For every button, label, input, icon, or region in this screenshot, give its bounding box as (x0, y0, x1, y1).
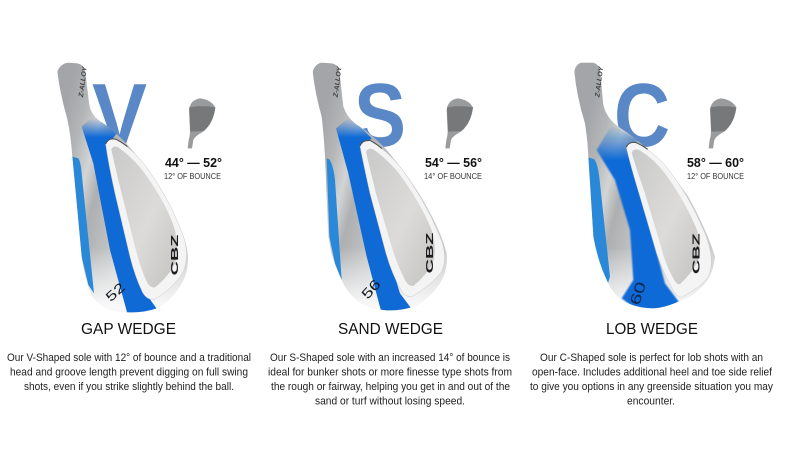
logo: CBZ: CBZ (692, 233, 703, 274)
wedge illustration: gap wedge (57, 62, 188, 312)
large letter V: V (92, 65, 147, 164)
large letter C: C (614, 66, 670, 166)
logo: CBZ: CBZ (170, 235, 181, 275)
bounce label: 14° OF BOUNCE (424, 172, 482, 181)
description: sand wedge: Our S-Shaped sole with an increased 14° of bounce is (270, 352, 511, 364)
heading: gap wedge: GAP WEDGE (81, 321, 176, 338)
description: gap wedge: shots, even if you strike slightly behind the ball. (24, 381, 234, 393)
loft stamp: 60: 60 (628, 280, 650, 307)
loft range: 44° — 52° (165, 155, 222, 170)
description: lob wedge: to give you options in any greenside situation you may (530, 381, 774, 393)
loft range: 58° — 60° (687, 155, 744, 170)
description: lob wedge (530, 352, 774, 408)
logo: Z-ALLOY: Z-ALLOY (333, 66, 343, 99)
description: lob wedge: open-face. Includes additional heel and toe side relief (532, 366, 773, 378)
description: gap wedge (7, 352, 251, 393)
description: gap wedge: head and groove length prevent digging on full swing (10, 366, 248, 378)
description: gap wedge: Our V-Shaped sole with 12° of bounce and a traditional (7, 352, 251, 364)
logo: Z-ALLOY: Z-ALLOY (594, 66, 605, 99)
wedge illustration: sand wedge (312, 62, 447, 310)
icon: small wedge head (445, 98, 473, 148)
description: sand wedge: ideal for bunker shots or more finesse type shots from (268, 366, 512, 378)
loft range: 54° — 56° (425, 155, 482, 170)
bounce label: 12° OF BOUNCE (164, 172, 221, 181)
description: lob wedge: encounter. (627, 396, 675, 408)
logo: CBZ: CBZ (425, 233, 436, 273)
icon: small wedge head (709, 98, 736, 148)
wedge illustration: lob wedge (574, 62, 715, 308)
description: sand wedge (268, 352, 512, 408)
loft stamp: 52: 52 (103, 280, 128, 305)
description: lob wedge: Our C-Shaped sole is perfect for lob shots with an (540, 352, 763, 364)
logo: Z-ALLOY: Z-ALLOY (78, 66, 89, 99)
bounce label: 12° OF BOUNCE (687, 172, 744, 181)
heading: sand wedge: SAND WEDGE (338, 321, 443, 338)
panel: lob wedge (530, 50, 774, 408)
description: sand wedge: sand or turf without losing speed. (315, 396, 465, 408)
heading: lob wedge: LOB WEDGE (606, 321, 698, 338)
description: sand wedge: the rough or fairway, helping you get in and out of the (271, 381, 510, 393)
loft stamp: 56: 56 (358, 276, 384, 302)
panel: sand wedge (268, 50, 512, 408)
icon: small wedge head (188, 98, 215, 148)
panel: gap wedge (7, 50, 251, 393)
large letter S: S (354, 66, 406, 166)
